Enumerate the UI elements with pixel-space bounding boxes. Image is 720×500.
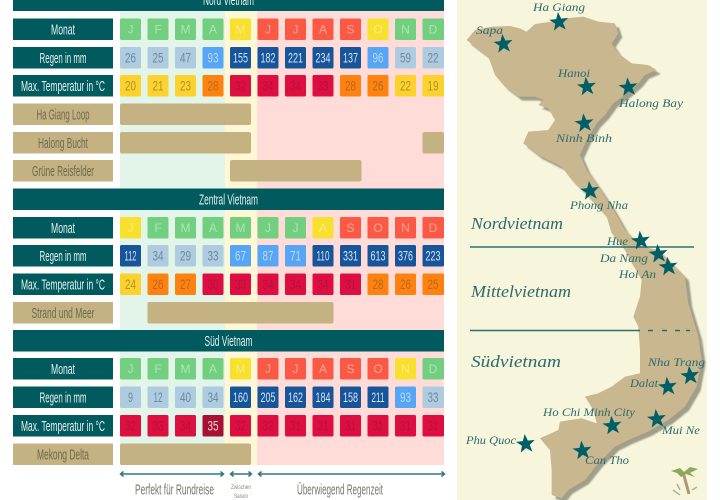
row: Regen in mm xyxy=(13,47,444,68)
row: Monat: A xyxy=(319,22,327,36)
row: Max. Temperatur: 32 xyxy=(262,418,274,434)
row: Max. Temperatur: 28 xyxy=(345,78,356,94)
region labels xyxy=(470,214,571,371)
row: Strand und Meer: Strand und Meer xyxy=(32,305,95,322)
heading: Süd Vietnam: Süd Vietnam xyxy=(204,333,252,350)
row: Max. Temperatur: 23 xyxy=(180,78,191,94)
row: Ha Giang Loop: Ha Giang Loop xyxy=(36,106,90,124)
panel: map of Vietnam xyxy=(457,0,707,500)
row: Max. Temperatur: 32 xyxy=(125,418,136,434)
row: Monat: J xyxy=(265,22,271,36)
row: Max. Temperatur xyxy=(13,75,444,96)
row: Monat: M xyxy=(180,362,190,376)
row: Monat: Monat xyxy=(51,220,75,237)
row: Monat: M xyxy=(236,221,246,235)
row: Monat: O xyxy=(373,362,383,376)
row: Max. Temperatur: 33 xyxy=(152,418,164,434)
city labels: Hanoi xyxy=(557,68,590,80)
row: Max. Temperatur: 31 xyxy=(428,418,439,434)
row: Max. Temperatur: Max. Temperatur in °C xyxy=(21,418,105,435)
heading: Nord Vietnam xyxy=(13,0,444,11)
row: Max. Temperatur: 24 xyxy=(125,276,136,292)
row: Regen in mm xyxy=(13,245,444,266)
row: Regen in mm xyxy=(13,386,444,408)
row: Monat: M xyxy=(180,221,190,235)
row: Max. Temperatur: 34 xyxy=(180,418,191,434)
region labels: Nordvietnam xyxy=(470,214,563,233)
row: Regen in mm: 184 xyxy=(316,389,331,405)
legend: Zwischen Saison xyxy=(230,472,252,500)
map shape: Vietnam xyxy=(467,17,706,500)
row: Regen in mm: 137 xyxy=(343,50,358,66)
row: Regen in mm: 12 xyxy=(154,389,163,405)
row: Max. Temperatur: 26 xyxy=(152,276,164,292)
row: Regen in mm: 223 xyxy=(426,248,441,264)
legend: Perfekt für Rundreise: Perfekt für Rundreise xyxy=(135,482,214,498)
region labels: Südvietnam xyxy=(471,352,561,371)
row: Regen in mm: 112 xyxy=(124,248,137,264)
row: Monat: O xyxy=(373,22,383,36)
row: Max. Temperatur: 34 xyxy=(262,276,274,292)
row: Monat: J xyxy=(128,22,134,36)
row: Monat: N xyxy=(401,362,410,376)
city labels: Dalat xyxy=(629,378,659,390)
divider: Mittel / Süd xyxy=(470,330,690,332)
row: Monat: A xyxy=(209,362,217,376)
row: Max. Temperatur: 31 xyxy=(290,418,301,434)
row: Max. Temperatur: 22 xyxy=(400,78,411,94)
row: Max. Temperatur: 26 xyxy=(372,78,384,94)
row: Max. Temperatur: 27 xyxy=(180,276,191,292)
row: Grüne Reisfelder xyxy=(13,160,362,182)
row: Regen in mm: 160 xyxy=(233,389,248,405)
row: Regen in mm: 9 xyxy=(128,389,133,405)
row: Monat xyxy=(13,18,444,40)
heading: Süd Vietnam xyxy=(13,330,444,352)
row: Monat: J xyxy=(292,22,298,36)
city labels: Ha Giang xyxy=(532,2,585,14)
heading: Zentral Vietnam: Zentral Vietnam xyxy=(199,192,258,208)
city labels: Hue xyxy=(606,236,628,248)
row: Max. Temperatur: 31 xyxy=(372,418,384,434)
row: Regen in mm: 93 xyxy=(400,389,411,405)
row: Max. Temperatur: 28 xyxy=(372,276,384,292)
row: Monat: F xyxy=(154,22,162,36)
city labels: Mui Ne xyxy=(661,425,700,437)
row: Monat: J xyxy=(265,221,271,235)
row: Regen in mm: 182 xyxy=(260,50,276,66)
row: Grüne Reisfelder: Grüne Reisfelder xyxy=(32,163,94,180)
row: Regen in mm: 613 xyxy=(370,248,386,264)
row: Mekong Delta xyxy=(13,444,251,465)
row: Halong Bucht xyxy=(13,132,444,154)
row: Halong Bucht: Halong Bucht xyxy=(38,135,88,152)
legend: Perfekt für Rundreise xyxy=(120,472,224,498)
row: Regen in mm: 87 xyxy=(262,248,274,264)
city labels: Hoi An xyxy=(618,269,656,281)
row: Max. Temperatur: 28 xyxy=(208,78,219,94)
row: Monat xyxy=(13,358,444,380)
row: Max. Temperatur: 31 xyxy=(345,418,356,434)
row: Regen in mm: 93 xyxy=(208,50,219,66)
row: Monat: O xyxy=(373,221,383,235)
city labels: Phu Quoc xyxy=(465,435,516,447)
row: Regen in mm: Regen in mm xyxy=(40,50,86,67)
row: Monat: J xyxy=(292,221,298,235)
heading: Zentral Vietnam xyxy=(13,188,444,210)
row: Max. Temperatur: 20 xyxy=(125,78,136,94)
row: Regen in mm: Regen in mm xyxy=(40,390,86,406)
row: Monat: Monat xyxy=(51,22,75,38)
row: Max. Temperatur: 19 xyxy=(428,78,439,94)
row: Monat: S xyxy=(346,362,355,376)
row: Regen in mm: 376 xyxy=(398,248,413,264)
row: Regen in mm: 59 xyxy=(400,50,411,66)
legend: Zwischen Saison: Zwischen xyxy=(231,484,251,491)
city labels: Da Nang xyxy=(599,253,648,265)
city labels: Can Tho xyxy=(585,455,629,467)
row: Regen in mm: 96 xyxy=(372,50,384,66)
row: Max. Temperatur: 26 xyxy=(400,276,411,292)
background band: perfect season xyxy=(120,11,225,465)
row: Monat xyxy=(13,217,444,238)
panel: Zentral Vietnam table xyxy=(13,188,444,324)
row: Max. Temperatur: 21 xyxy=(152,78,164,94)
row: Max. Temperatur xyxy=(13,415,444,436)
row: Monat: D xyxy=(429,221,438,235)
row: Regen in mm: Regen in mm xyxy=(40,248,86,265)
row: Monat: A xyxy=(209,221,217,235)
row: Regen in mm: 33 xyxy=(208,248,219,264)
panel: Nord Vietnam table xyxy=(13,0,444,182)
legend: Überwiegend Regenzeit: Überwiegend Regenzeit xyxy=(297,480,383,498)
row: Max. Temperatur: Max. Temperatur in °C xyxy=(21,276,105,294)
row: Regen in mm: 40 xyxy=(180,389,191,405)
row: Monat: F xyxy=(154,221,162,235)
row: Regen in mm: 331 xyxy=(343,248,358,264)
row: Monat: S xyxy=(346,221,355,235)
row: Regen in mm: 22 xyxy=(428,50,439,66)
row: Regen in mm: 67 xyxy=(235,248,246,264)
row: Max. Temperatur: 34 xyxy=(290,78,301,94)
row: Mekong Delta: Mekong Delta xyxy=(37,446,89,464)
row: Strand und Meer xyxy=(13,302,334,324)
row: Max. Temperatur: 33 xyxy=(318,78,329,94)
row: Monat: M xyxy=(236,362,246,376)
row: Max. Temperatur: 34 xyxy=(290,276,301,292)
row: Monat: Monat xyxy=(51,361,75,378)
row: Monat: A xyxy=(319,221,327,235)
row: Max. Temperatur: 32 xyxy=(235,78,246,94)
city labels: Halong Bay xyxy=(618,98,684,110)
legend: Überwiegend Regenzeit xyxy=(258,472,444,498)
row: Max. Temperatur: 33 xyxy=(235,276,246,292)
stars xyxy=(493,11,700,460)
row: Monat: J xyxy=(265,362,271,376)
row: Monat: A xyxy=(319,362,327,376)
row: Monat: S xyxy=(346,22,355,36)
row: Monat: D xyxy=(429,362,438,376)
panel: Süd Vietnam table xyxy=(13,330,444,465)
row: Monat: M xyxy=(180,22,190,36)
row: Regen in mm: 234 xyxy=(316,50,331,66)
legend: Zwischen Saison: Saison xyxy=(234,493,248,500)
row: Monat: J xyxy=(128,221,134,235)
divider: Nord / Mittel xyxy=(470,246,694,248)
row: Monat: N xyxy=(401,221,410,235)
row: Regen in mm: 29 xyxy=(180,248,191,264)
row: Regen in mm: 34 xyxy=(152,248,164,264)
row: Monat: J xyxy=(128,362,134,376)
row: Regen in mm: 47 xyxy=(180,50,191,66)
row: Max. Temperatur xyxy=(13,274,444,295)
row: Max. Temperatur: 31 xyxy=(400,418,411,434)
row: Regen in mm: 25 xyxy=(152,50,164,66)
city labels: Sapa xyxy=(476,25,503,37)
city labels xyxy=(465,2,705,467)
row: Max. Temperatur: Max. Temperatur in °C xyxy=(21,78,105,95)
city labels: Phong Nha xyxy=(569,200,628,212)
row: Max. Temperatur: 25 xyxy=(428,276,439,292)
row: Max. Temperatur: 34 xyxy=(318,276,329,292)
row: Regen in mm: 26 xyxy=(125,50,136,66)
row: Regen in mm: 33 xyxy=(428,389,439,405)
row: Monat: F xyxy=(154,362,162,376)
row: Max. Temperatur: 31 xyxy=(345,276,356,292)
row: Max. Temperatur: 34 xyxy=(262,78,274,94)
row: Regen in mm: 110 xyxy=(316,248,330,264)
city labels: Ninh Binh xyxy=(555,133,612,145)
row: Max. Temperatur: 35 xyxy=(208,418,219,434)
background band: intermediate season xyxy=(225,11,257,465)
row: Regen in mm: 34 xyxy=(208,389,219,405)
row: Regen in mm: 205 xyxy=(260,389,276,405)
row: Monat: J xyxy=(292,362,298,376)
background band: rainy season xyxy=(257,11,444,465)
row: Ha Giang Loop xyxy=(13,104,251,125)
row: Max. Temperatur: 32 xyxy=(235,418,246,434)
row: Max. Temperatur: 31 xyxy=(318,418,329,434)
region labels: Mittelvietnam xyxy=(470,282,571,301)
city labels: Ho Chi Minh City xyxy=(542,407,636,419)
row: Regen in mm: 71 xyxy=(290,248,301,264)
row: Monat: A xyxy=(209,22,217,36)
row: Monat: M xyxy=(236,22,246,36)
row: Regen in mm: 158 xyxy=(343,389,358,405)
row: Monat: N xyxy=(401,22,410,36)
row: Monat: D xyxy=(429,22,438,36)
row: Max. Temperatur: 30 xyxy=(208,276,219,292)
icon: palm tree logo xyxy=(671,467,698,495)
row: Regen in mm: 155 xyxy=(233,50,248,66)
row: Regen in mm: 211 xyxy=(372,389,385,405)
row: Regen in mm: 221 xyxy=(288,50,303,66)
city labels: Nha Trang xyxy=(647,357,705,369)
row: Regen in mm: 162 xyxy=(288,389,303,405)
